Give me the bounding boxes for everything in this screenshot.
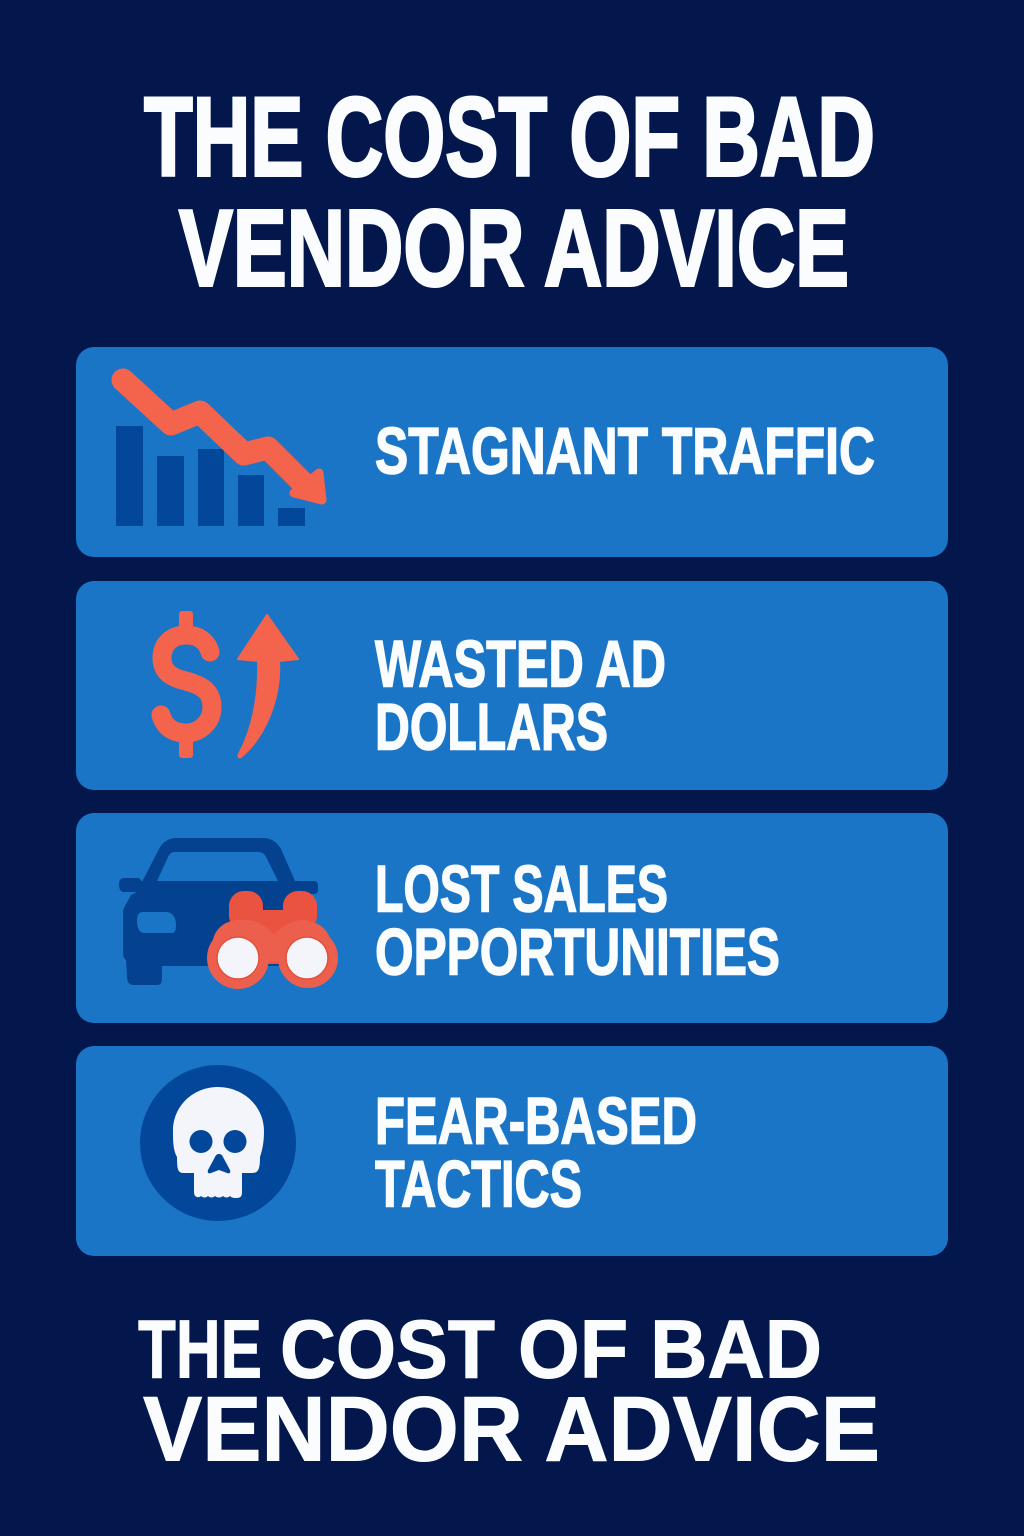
label	[375, 1084, 697, 1220]
label: OPPORTUNITIES	[375, 914, 780, 988]
title	[144, 74, 875, 310]
footer title: OF BAD	[518, 1302, 822, 1396]
panel: wasted ad dollars	[76, 581, 948, 790]
label	[375, 626, 666, 764]
footer title: COST	[280, 1302, 495, 1396]
icon: falling bar chart with red arrow	[116, 380, 322, 526]
label	[375, 852, 780, 988]
label: LOST SALES	[375, 852, 668, 926]
binoculars	[207, 891, 338, 989]
label: TACTICS	[375, 1146, 582, 1220]
car	[119, 838, 318, 985]
label: STAGNANT TRAFFIC	[375, 414, 875, 488]
label: WASTED AD	[375, 626, 666, 700]
label: DOLLARS	[375, 690, 608, 764]
icon: dollar sign with rising arrow	[161, 611, 298, 758]
footer title	[138, 1302, 880, 1480]
footer title: VENDOR ADVICE	[143, 1378, 880, 1480]
label: FEAR-BASED	[375, 1084, 697, 1158]
panel: lost sales opportunities	[76, 813, 948, 1023]
panel: stagnant traffic	[76, 347, 948, 557]
icon: skull in circle	[140, 1065, 296, 1221]
icon: car with binoculars	[119, 838, 338, 989]
footer title: THE	[138, 1302, 262, 1396]
panel: fear-based tactics	[76, 1046, 948, 1256]
